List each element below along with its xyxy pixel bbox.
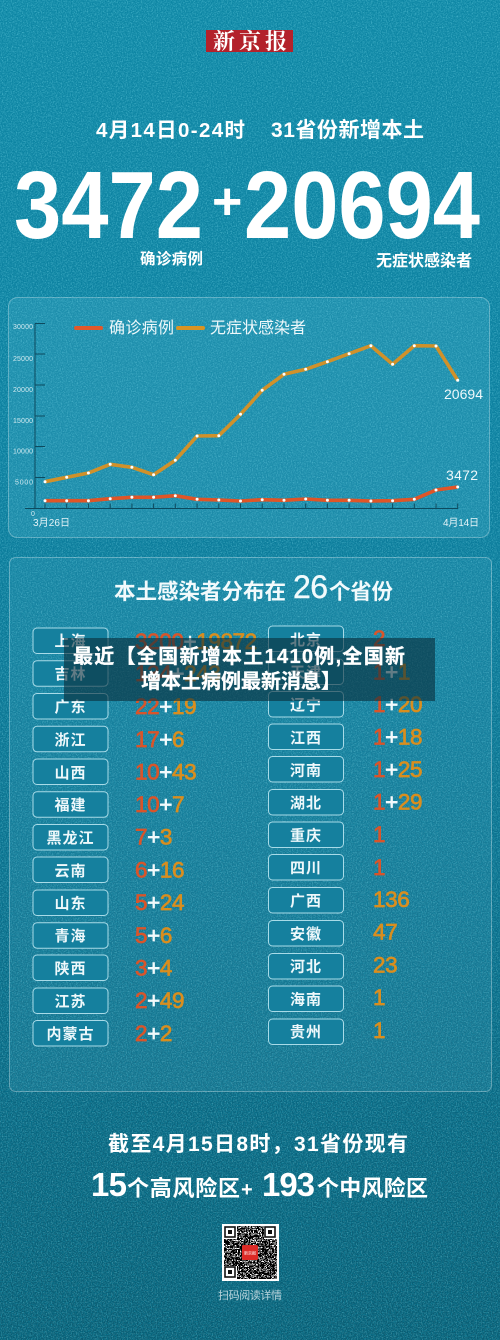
left column rows: 10+7 xyxy=(135,792,184,817)
right column rows: 2 xyxy=(373,626,385,651)
left column rows: 3+4 xyxy=(135,956,172,980)
chart axis labels: 3月26日 xyxy=(33,517,70,529)
left column rows: 云南 xyxy=(54,863,87,880)
heading: date and scope: 4月14日0-24时 xyxy=(96,119,245,142)
left column rows: 山西 xyxy=(54,765,87,782)
right column rows: 四川 xyxy=(290,860,322,877)
left column rows xyxy=(33,628,257,1046)
right column rows: 1 xyxy=(373,1018,385,1043)
right column rows: 湖北 xyxy=(290,795,322,812)
left column rows: 陕西 xyxy=(54,960,87,978)
right column rows: 1+25 xyxy=(373,757,422,782)
footer: risk areas: 15 xyxy=(91,1166,127,1203)
left column rows: 2+49 xyxy=(135,988,184,1013)
left column rows: 浙江 xyxy=(54,731,87,749)
left column rows: 吉林 xyxy=(54,665,87,683)
right column rows: 安徽 xyxy=(290,925,322,943)
footer: risk areas xyxy=(91,1133,428,1203)
footer: risk areas: 个高风险区 xyxy=(127,1176,240,1201)
left column rows: 山东 xyxy=(54,894,87,912)
right column rows: 1+1 xyxy=(373,660,410,684)
chart axis labels: 4月14日 xyxy=(443,517,479,529)
right column rows xyxy=(268,626,422,1044)
right column rows: 47 xyxy=(373,920,397,944)
right column rows: 天津 xyxy=(290,664,322,682)
chart legend: 无症状感染者 xyxy=(210,319,306,337)
heading: date and scope xyxy=(96,118,424,142)
footer: risk areas: 截至4月15日8时，31省份现有 xyxy=(108,1133,408,1156)
chart legend xyxy=(76,319,306,337)
left column rows: 5+6 xyxy=(135,923,172,948)
left column rows: 2+2 xyxy=(135,1021,172,1046)
panel: provinces xyxy=(10,558,492,1092)
left column rows: 17+6 xyxy=(135,727,184,752)
left column rows: 134+243 xyxy=(135,661,220,686)
right column rows: 1+20 xyxy=(373,692,422,717)
title overlay banner: 增本土病例最新消息】 xyxy=(141,669,341,693)
chart axis labels: 25000 xyxy=(13,356,33,363)
right column rows: 河北 xyxy=(290,958,322,976)
chart legend: 确诊病例 xyxy=(109,319,174,337)
right column rows: 23 xyxy=(373,952,397,978)
end value labels: 3472 xyxy=(446,467,478,483)
headline numbers: 确诊病例 xyxy=(140,249,203,268)
series: confirmed xyxy=(44,486,459,502)
right column rows: 辽宁 xyxy=(290,696,322,714)
footer: risk areas: 个中风险区 xyxy=(317,1176,428,1201)
chart axis labels xyxy=(13,324,479,529)
right column rows: 北京 xyxy=(290,631,322,649)
footer: risk areas: + xyxy=(241,1179,253,1201)
heading: date and scope: 31省份新增本土 xyxy=(271,118,424,142)
QR caption: 扫码阅读详情 xyxy=(218,1288,282,1302)
right column rows: 1 xyxy=(373,855,385,880)
chart axis labels: 5000 xyxy=(15,480,33,486)
right column rows: 1+29 xyxy=(373,790,422,814)
series: asymptomatic xyxy=(44,344,459,483)
title overlay banner: 最近【全国新增本土1410例,全国新 xyxy=(73,644,405,668)
chart axis labels: 20000 xyxy=(13,387,33,394)
chart axes xyxy=(25,324,458,508)
left column rows: 江苏 xyxy=(54,994,87,1010)
right column rows: 河南 xyxy=(290,762,322,780)
right column rows: 1+18 xyxy=(373,724,422,750)
right column rows: 贵州 xyxy=(290,1024,322,1041)
headline numbers xyxy=(14,152,480,270)
left column rows: 广东 xyxy=(54,698,87,716)
left column rows: 3200+19872 xyxy=(135,629,257,654)
panel heading: 个省份 xyxy=(329,580,393,604)
left column rows: 6+16 xyxy=(135,858,184,882)
end value labels xyxy=(444,386,483,483)
chart axis labels: 0 xyxy=(31,511,35,518)
panel heading xyxy=(114,569,393,605)
panel heading: 本土感染者分布在 xyxy=(114,579,286,604)
left column rows: 5+24 xyxy=(135,890,184,915)
chart axis labels: 10000 xyxy=(13,448,33,456)
logo: 新京报: 新京报 xyxy=(213,29,287,54)
title overlay banner xyxy=(64,638,435,701)
left column rows: 7+3 xyxy=(135,824,172,850)
left column rows: 22+19 xyxy=(135,694,196,719)
headline numbers: 3472 xyxy=(14,152,203,259)
left column rows: 10+43 xyxy=(135,760,196,784)
footer: risk areas: 193 xyxy=(262,1166,315,1203)
chart axis labels: 30000 xyxy=(13,324,33,331)
QR code: 新京报 xyxy=(244,1250,256,1256)
left column rows: 福建 xyxy=(54,796,87,814)
right column rows: 1 xyxy=(373,822,385,847)
left column rows: 内蒙古 xyxy=(46,1025,95,1043)
headline numbers: 无症状感染者 xyxy=(376,251,472,270)
QR code xyxy=(222,1224,279,1281)
panel heading: 26 xyxy=(293,569,328,605)
right column rows: 江西 xyxy=(290,730,322,747)
left column rows: 黑龙江 xyxy=(46,829,95,847)
end value labels: 20694 xyxy=(444,386,483,402)
right column rows: 136 xyxy=(373,887,409,912)
right column rows: 重庆 xyxy=(290,826,322,844)
right column rows: 广西 xyxy=(290,892,322,910)
right column rows: 海南 xyxy=(290,990,322,1008)
chart axis labels: 15000 xyxy=(13,418,33,425)
panel: line chart xyxy=(8,298,490,538)
right column rows: 1 xyxy=(373,985,385,1010)
left column rows: 上海 xyxy=(54,632,87,650)
headline numbers: + xyxy=(212,173,242,231)
left column rows: 青海 xyxy=(54,927,87,945)
